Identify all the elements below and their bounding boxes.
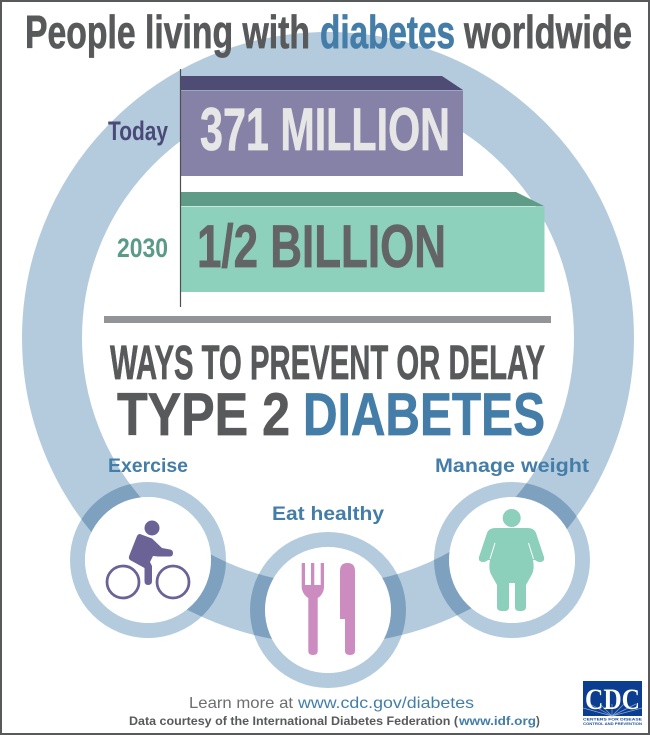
bar chart [108,69,544,307]
icon: cyclist [107,520,189,598]
eat healthy item [258,504,398,680]
large ring [52,62,604,614]
bar: 2030: 1/2 BILLION [197,213,446,280]
exercise item [78,456,218,630]
ring: manage weight [442,490,582,630]
footer: data source: www.idf.org [458,716,536,728]
footer: data source: Data courtesy of the International Diabetes Federation ( [129,716,458,728]
title [25,6,632,58]
logo: CDC: CENTERS FOR DISEASE [583,718,643,722]
logo: CDC: CDC [585,683,640,716]
footer: learn more [189,695,474,712]
title: People living with [25,6,310,58]
manage weight item [435,456,590,630]
logo: CDC [583,681,643,726]
heading: type 2 diabetes: TYPE 2 [117,381,290,448]
label: manage weight: Manage weight [435,456,590,477]
icon: person [479,509,544,611]
footer: data source: ) [536,716,540,728]
label: exercise: Exercise [108,456,188,477]
title: diabetes [320,6,455,58]
logo: CDC: CONTROL AND PREVENTION [583,722,643,726]
axis [180,69,182,307]
heading: type 2 diabetes: DIABETES [303,381,545,448]
footer: learn more: www.cdc.gov/diabetes [297,695,474,712]
ring: eat healthy [258,540,398,680]
icon: knife [340,563,355,655]
footer: learn more: Learn more at [189,695,294,712]
bar: today [181,76,463,176]
label: today: Today [108,116,168,146]
label: eat healthy: Eat healthy [272,504,384,525]
label: 2030: 2030 [117,233,168,263]
ring: exercise [78,490,218,630]
bar: 2030 [181,192,544,292]
heading: type 2 diabetes [117,381,545,448]
icon: fork [302,563,324,655]
bar: today: 371 MILLION [200,96,450,163]
